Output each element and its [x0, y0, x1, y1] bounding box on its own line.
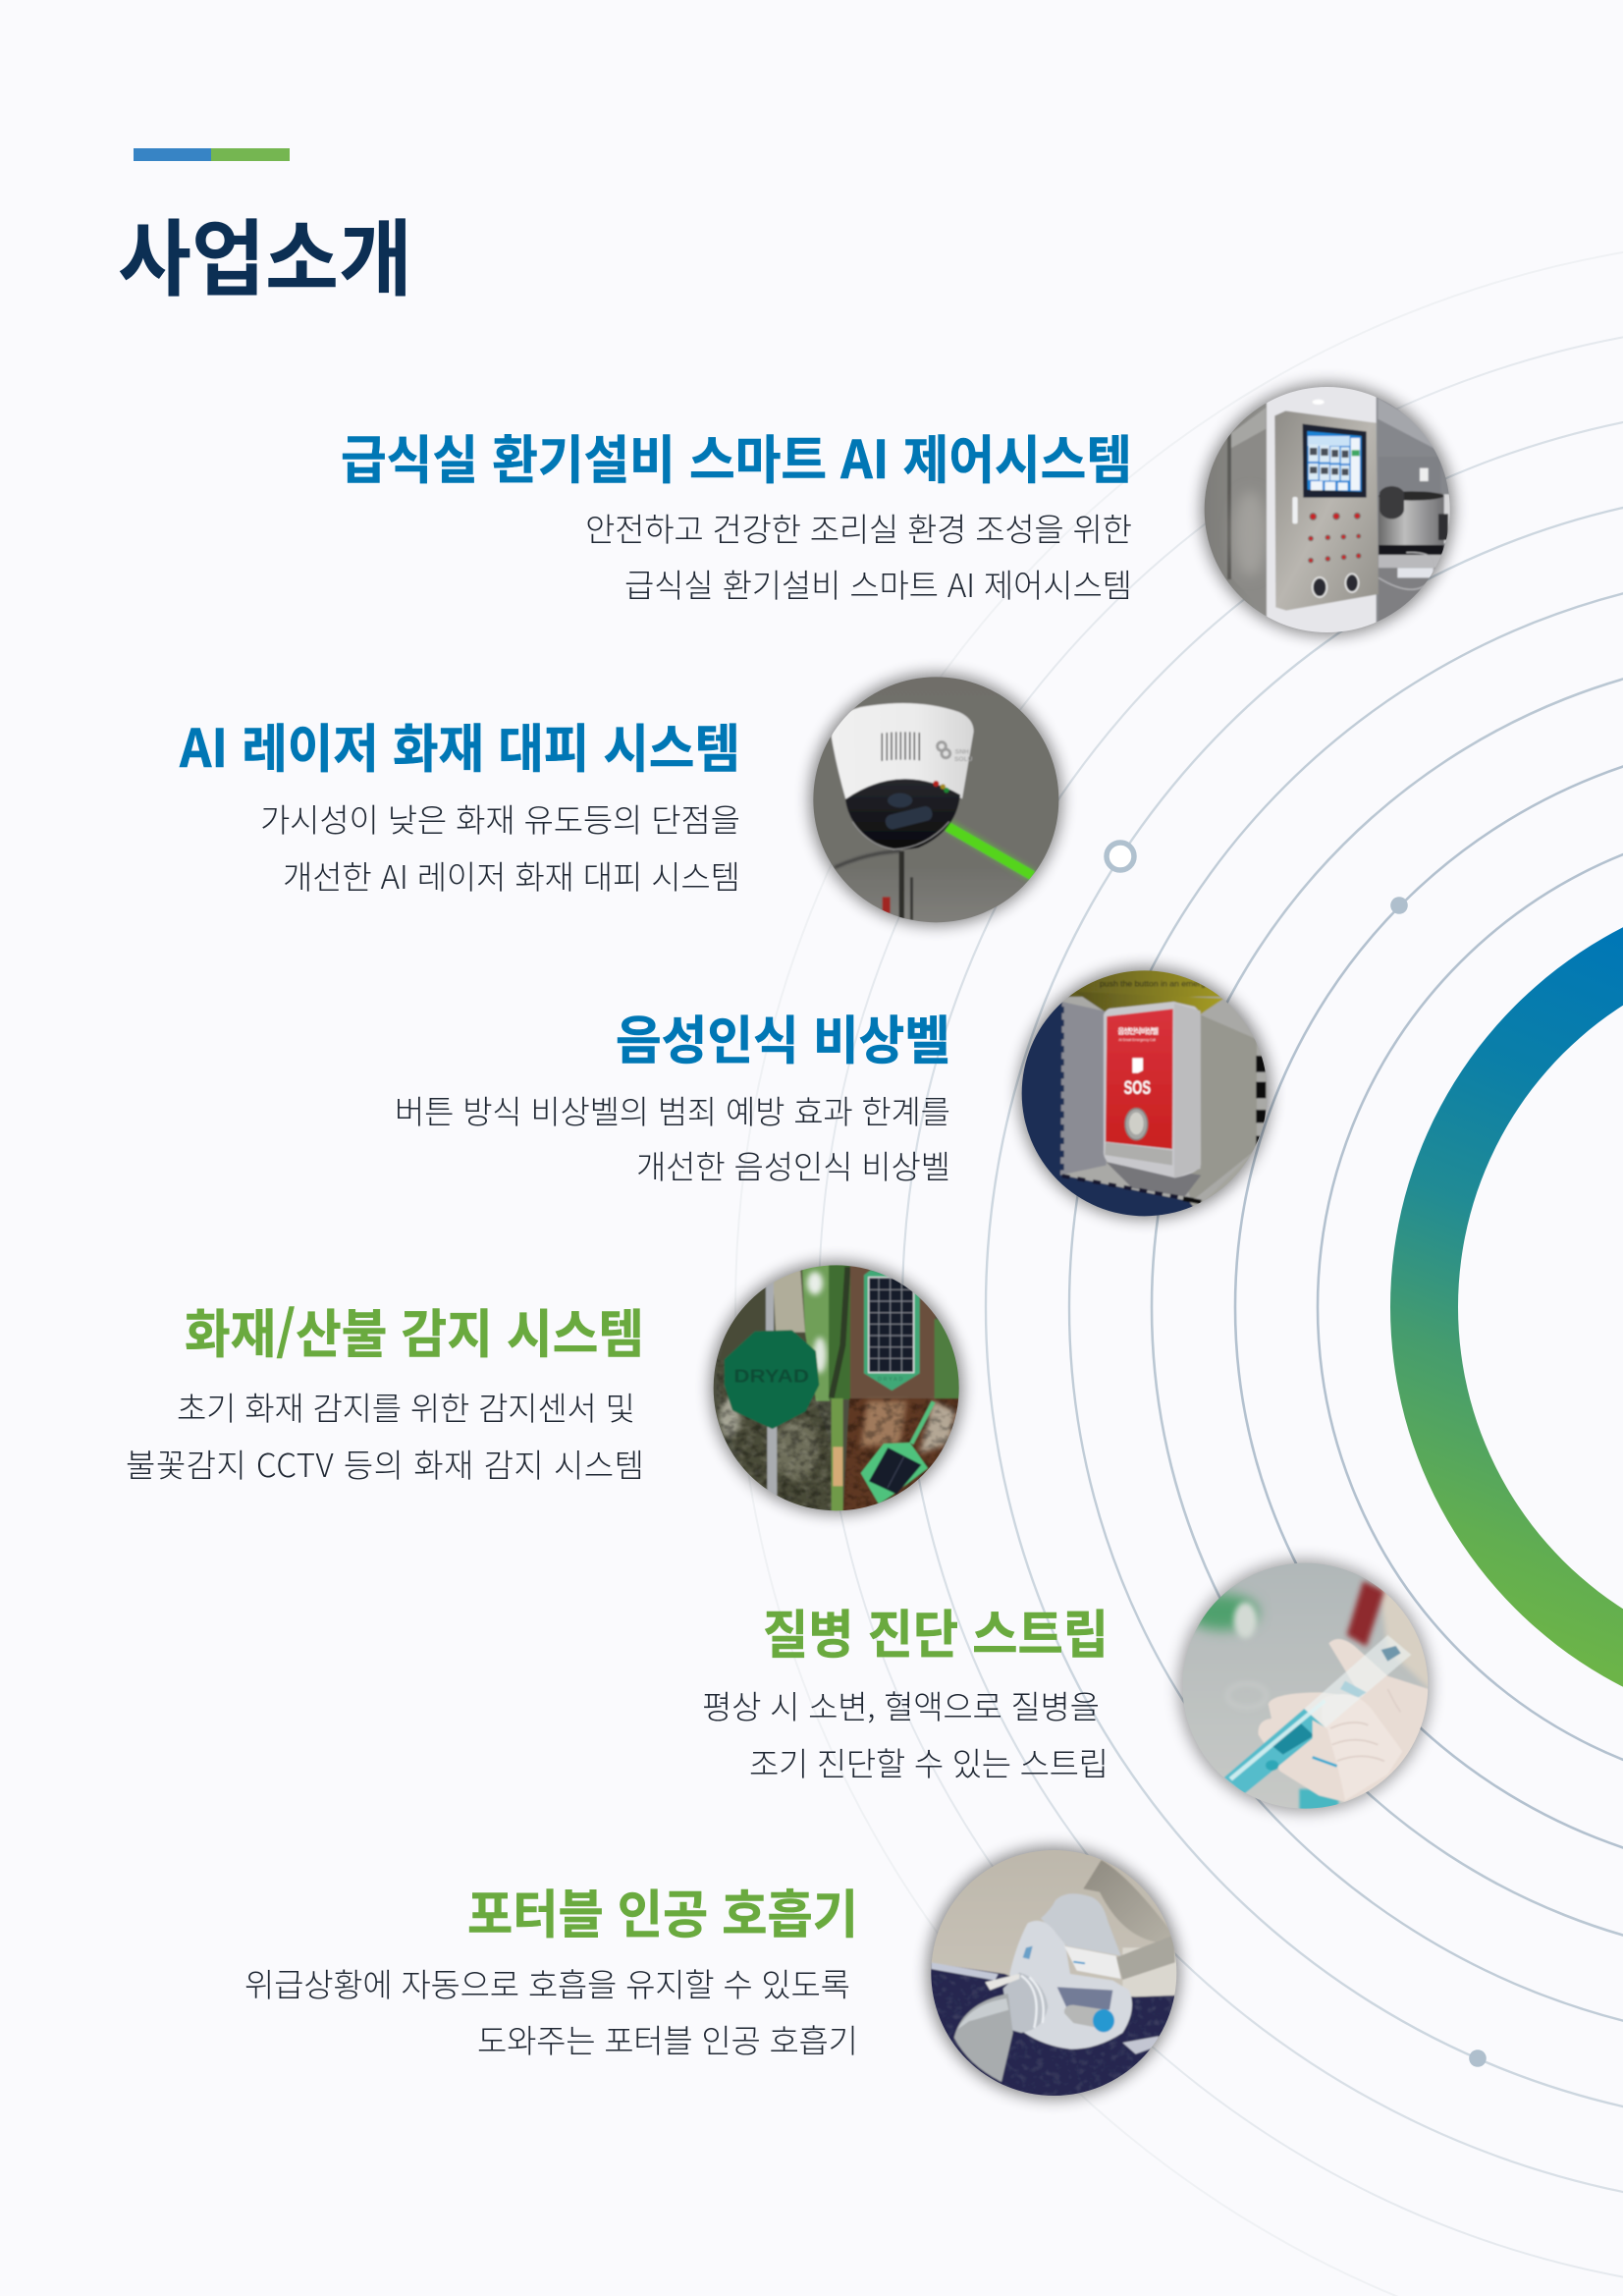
photo: diagnostic strip tube: [1175, 1558, 1436, 1820]
photo: SOS voice emergency bell: AI Smart Emergency Call: [1118, 1038, 1156, 1042]
description 5: 평상 시 소변, 혈액으로 질병을: [702, 1681, 1100, 1728]
description 3: 버튼 방식 비상벨의 범죄 예방 효과 한계를: [395, 1086, 950, 1133]
photo: SOS voice emergency bell: push the button in an emerg: [1100, 978, 1206, 988]
description 5: [702, 1681, 1109, 1785]
description 4: 불꽃감지 CCTV 등의 화재 감지 시스템: [126, 1440, 644, 1487]
photo: forest fire sensors: [710, 1260, 965, 1515]
photo: portable respirator mask: [926, 1846, 1188, 2108]
description 2: 개선한 AI 레이저 화재 대피 시스템: [283, 851, 740, 899]
concentric orbit lines: [735, 237, 1623, 2296]
gradient ring arc: [1390, 881, 1623, 1733]
ring marker on orbit: [1107, 843, 1134, 870]
photo: SOS voice emergency bell: [1014, 962, 1276, 1228]
heading 5: 질병 진단 스트립: [763, 1594, 1109, 1668]
dot marker lower orbit: [1469, 2050, 1487, 2067]
description 5: 조기 진단할 수 있는 스트립: [749, 1738, 1109, 1785]
photo: laser dome camera: SNH: [955, 749, 969, 756]
photo: laser dome camera: SOLU: [954, 756, 973, 763]
heading 4: 화재/산불 감지 시스템: [185, 1293, 644, 1368]
description 6: 위급상황에 자동으로 호흡을 유지할 수 있도록: [244, 1959, 850, 2006]
panel: item 1 text: [341, 419, 1132, 607]
header accent bar: [134, 148, 290, 161]
photo: laser dome camera: [805, 671, 1067, 933]
description 4: 초기 화재 감지를 위한 감지센서 및: [177, 1383, 635, 1430]
heading 3: 음성인식 비상벨: [616, 1000, 950, 1074]
description 6: 도와주는 포터블 인공 호흡기: [477, 2015, 858, 2062]
dot marker upper orbit: [1390, 897, 1408, 914]
description 1: [585, 504, 1132, 607]
description 1: 안전하고 건강한 조리실 환경 조성을 위한: [585, 504, 1132, 551]
photo: SOS voice emergency bell: SOS: [1124, 1078, 1151, 1099]
heading 2: AI 레이저 화재 대피 시스템: [179, 708, 740, 783]
description 3: 개선한 음성인식 비상벨: [636, 1141, 950, 1188]
description 2: [260, 794, 740, 899]
photo: forest fire sensors: DRYAD: [878, 1377, 902, 1383]
heading 6: 포터블 인공 호흡기: [467, 1874, 858, 1948]
photo: control panel: [1198, 383, 1460, 638]
description 3: [395, 1086, 950, 1188]
photo: forest fire sensors: DRYAD: [733, 1365, 809, 1386]
panel: item 2 text: [179, 708, 740, 899]
panel: item 4 text: [126, 1293, 644, 1487]
panel: item 6 text: [244, 1874, 858, 2062]
heading 1: 급식실 환기설비 스마트 AI 제어시스템: [341, 419, 1132, 494]
panel: item 3 text: [395, 1000, 950, 1188]
description 1: 급식실 환기설비 스마트 AI 제어시스템: [624, 560, 1132, 607]
description 2: 가시성이 낮은 화재 유도등의 단점을: [260, 794, 740, 842]
description 4: [126, 1383, 644, 1487]
title: 사업소개: [118, 192, 412, 313]
panel: item 5 text: [702, 1594, 1109, 1785]
photo: SOS voice emergency bell: 음성인식 비상벨: [1117, 1026, 1159, 1037]
description 6: [244, 1959, 858, 2062]
